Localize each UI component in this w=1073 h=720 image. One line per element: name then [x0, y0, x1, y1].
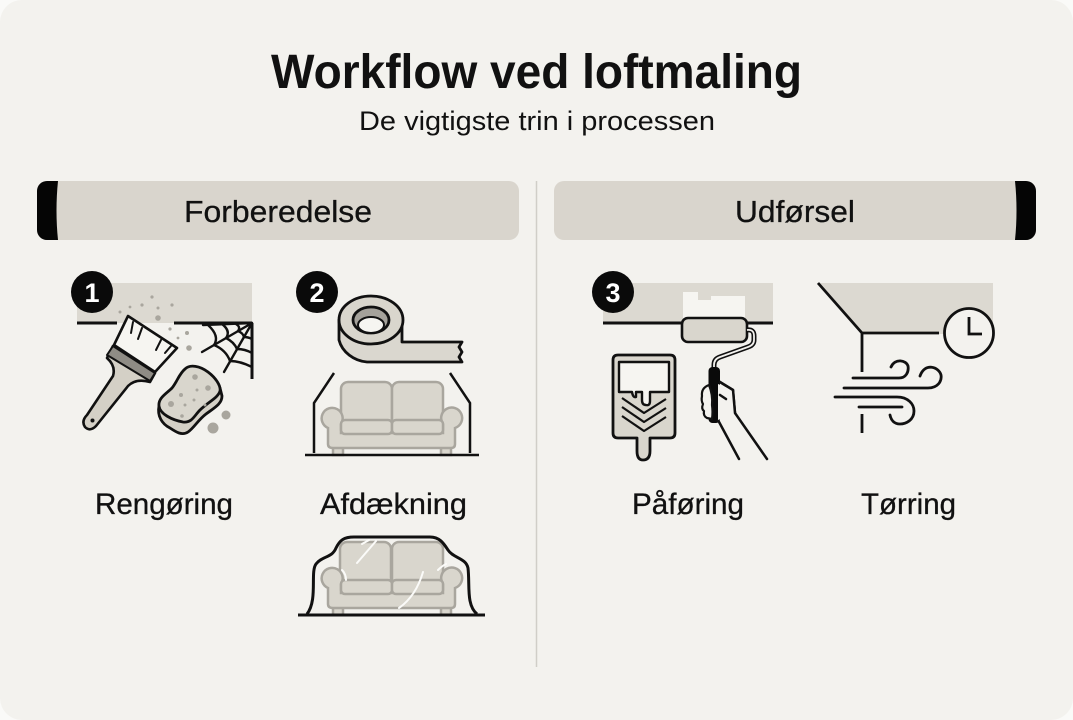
section header: Udførsel	[554, 181, 1036, 240]
wind	[835, 361, 941, 424]
badge 1	[71, 271, 113, 313]
section header: Forberedelse	[37, 181, 519, 240]
icon: sofa with open cover	[305, 373, 479, 455]
title: Workflow ved loftmaling	[271, 46, 802, 99]
paint tray	[613, 355, 675, 460]
dust specks	[118, 295, 230, 434]
paint brush	[83, 316, 177, 429]
hand	[702, 382, 767, 459]
label: Rengøring: Rengøring	[95, 488, 233, 521]
icon: cleaning (brush, sponge, cobweb)	[77, 283, 252, 434]
badge 2	[296, 271, 338, 313]
sponge	[159, 366, 222, 434]
label: Tørring: Tørring	[861, 488, 956, 521]
section header: Udførsel: Udførsel	[735, 194, 855, 229]
badge 1: 1	[84, 278, 100, 308]
section header: Forberedelse: Forberedelse	[184, 194, 372, 229]
subtitle: De vigtigste trin i processen	[359, 106, 715, 136]
label: Afdækning: Afdækning	[320, 488, 467, 521]
icon: covered sofa	[298, 537, 485, 615]
clock	[944, 308, 994, 358]
icon: drying (ceiling, clock, wind)	[818, 283, 994, 433]
badge 3	[592, 271, 634, 313]
fresh white paint	[683, 292, 745, 318]
icon: masking tape	[339, 296, 462, 362]
badge 3: 3	[605, 278, 621, 308]
icon: paint roller and tray	[603, 283, 773, 460]
roller	[682, 318, 747, 342]
label: Påføring: Påføring	[632, 488, 744, 521]
cobweb	[202, 323, 252, 372]
badge 2: 2	[309, 278, 325, 308]
cover lines and floor	[305, 373, 479, 455]
ceiling strip	[603, 283, 773, 323]
ceiling strip	[77, 283, 252, 323]
sofa	[322, 382, 462, 455]
